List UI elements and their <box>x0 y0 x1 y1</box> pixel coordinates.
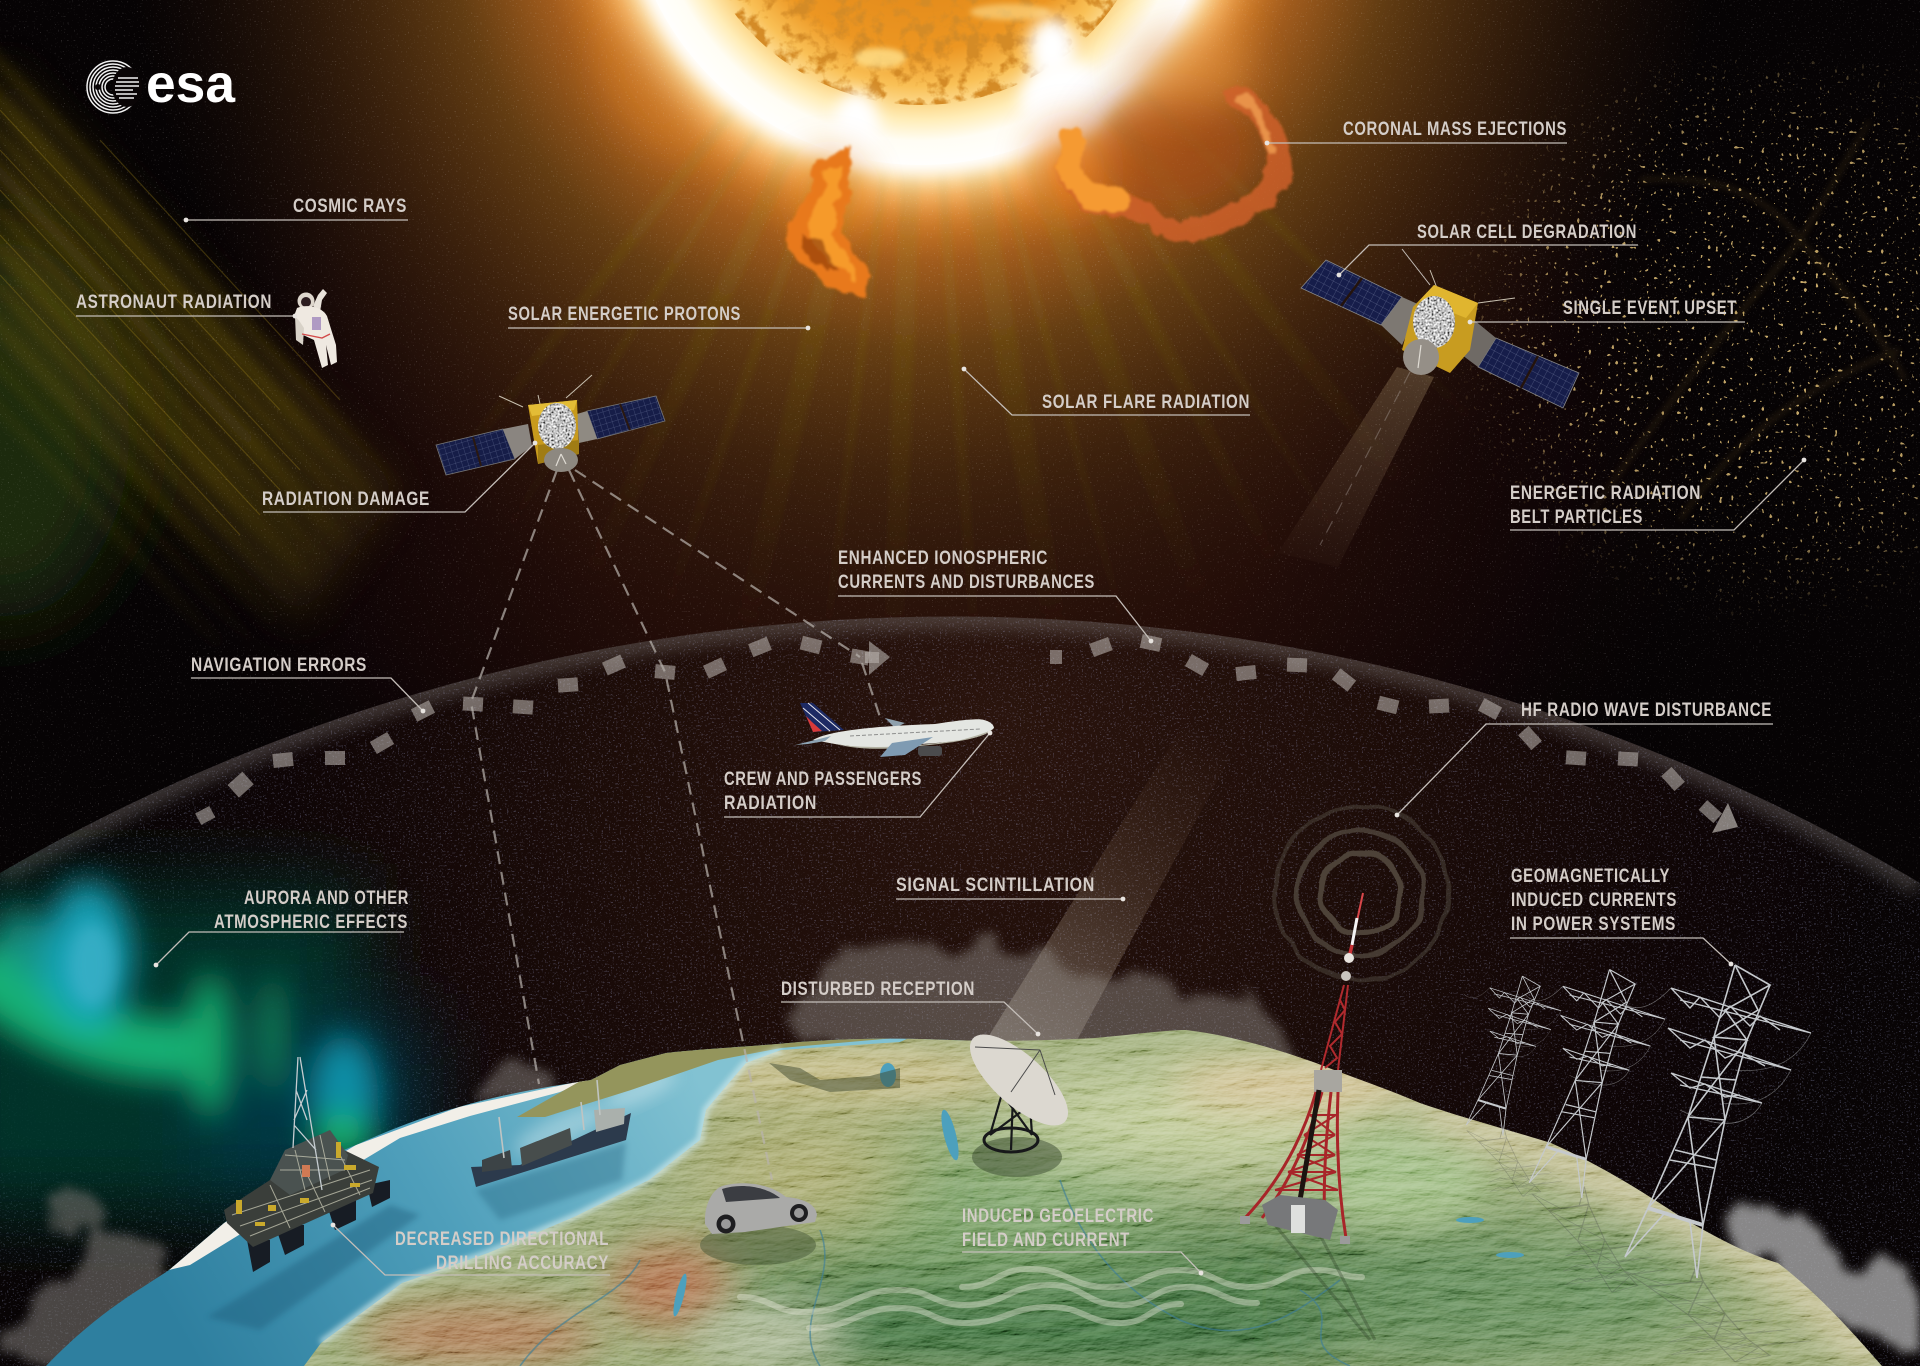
icon: navigation satellite <box>436 375 665 475</box>
label: astronaut radiation: ASTRONAUT RADIATION <box>76 292 272 313</box>
left prominence <box>785 150 872 297</box>
ionospheric dashed band right with arrow <box>1050 634 1738 833</box>
tail fin <box>800 703 844 732</box>
label: energetic radiation belt particles <box>1510 458 1806 530</box>
label: signal scintillation: SIGNAL SCINTILLATION <box>896 875 1095 896</box>
cosmic ray streaks <box>0 20 430 650</box>
label: solar flare radiation: SOLAR FLARE RADIATION <box>1042 392 1250 413</box>
icon: power transmission towers <box>1464 965 1811 1362</box>
label: single event upset: SINGLE EVENT UPSET <box>1563 298 1737 319</box>
icon: transmission tower <box>1240 893 1375 1340</box>
glow around loop <box>1085 85 1255 215</box>
land <box>304 1030 1882 1366</box>
label: HF radio wave disturbance <box>1395 700 1773 817</box>
tower shadow <box>1275 1225 1375 1340</box>
ionospheric dashed band left with arrow <box>195 636 890 825</box>
ocean <box>46 1038 972 1366</box>
peninsula <box>517 1038 895 1117</box>
atmosphere dome <box>0 616 1920 1366</box>
coast highlight <box>321 1050 781 1343</box>
label: disturbed reception <box>781 979 1040 1036</box>
label: solar flare radiation <box>962 367 1250 415</box>
derrick <box>293 1057 322 1190</box>
label: navigation errors <box>191 655 425 713</box>
label: cosmic rays <box>184 196 408 222</box>
ground current waves <box>740 1269 1362 1328</box>
hull <box>471 1113 631 1187</box>
label: single event upset <box>1468 298 1745 324</box>
label: radiation damage: RADIATION DAMAGE <box>262 489 430 510</box>
label: geomagnetically induced currents: IN POWER SYSTEMS <box>1511 914 1676 935</box>
icon: airplane <box>795 703 994 757</box>
sun <box>595 0 1247 195</box>
icon: astronaut <box>294 289 337 368</box>
upper lattice <box>1321 985 1348 1070</box>
signal scintillation beam <box>985 730 1245 1042</box>
base building <box>1262 1195 1338 1240</box>
dashed signal lines from satellite <box>471 470 882 1180</box>
label: coronal mass ejections <box>1265 119 1567 145</box>
icon: upper satellite <box>1301 260 1579 545</box>
antennas <box>499 375 592 407</box>
mast <box>1354 893 1363 935</box>
body <box>528 400 579 464</box>
label: enhanced ionospheric currents: ENHANCED IONOSPHERIC <box>838 548 1048 569</box>
label: induced geoelectric field: FIELD AND CURRENT <box>962 1230 1130 1251</box>
label: induced geoelectric field: INDUCED GEOELECTRIC <box>962 1206 1154 1227</box>
label: aurora and atmospheric effects: AURORA AND OTHER <box>244 888 409 909</box>
label: decreased directional drilling accuracy: DRILLING ACCURACY <box>436 1253 609 1274</box>
ESA globe <box>87 61 139 113</box>
label: coronal mass ejections: CORONAL MASS EJECTIONS <box>1343 119 1567 140</box>
label: crew and passengers radiation: CREW AND PASSENGERS <box>724 769 922 790</box>
label: solar cell degradation <box>1337 222 1638 285</box>
label: geomagnetically induced currents: GEOMAGNETICALLY <box>1511 866 1670 887</box>
solar prominences <box>785 30 1279 297</box>
label: decreased directional drilling accuracy <box>331 1223 610 1275</box>
icon: satellite dish <box>956 1020 1082 1177</box>
sun glow and rays <box>121 0 1721 688</box>
solar panels <box>436 429 515 475</box>
HF radio wave rings <box>1274 806 1448 980</box>
label: induced geoelectric field <box>962 1206 1203 1275</box>
label: energetic radiation belt particles: ENERGETIC RADIATION <box>1510 483 1701 504</box>
deck <box>224 1150 379 1247</box>
label: crew and passengers radiation <box>724 731 992 817</box>
label: radiation damage <box>262 441 537 512</box>
label: energetic radiation belt particles: BELT PARTICLES <box>1510 507 1643 528</box>
aurora <box>0 881 420 1210</box>
label: HF radio wave disturbance: HF RADIO WAVE DISTURBANCE <box>1521 700 1772 721</box>
ice edge <box>169 1079 591 1270</box>
label: aurora and atmospheric effects <box>154 888 409 967</box>
label: solar energetic protons: SOLAR ENERGETIC PROTONS <box>508 304 741 325</box>
icon: ship <box>471 1080 631 1220</box>
plane ground shadow <box>769 1063 900 1092</box>
right coronal loop <box>1068 96 1279 232</box>
label: enhanced ionospheric currents: CURRENTS AND DISTURBANCES <box>838 572 1095 593</box>
energetic belt particles: gold dots <box>1454 60 1920 624</box>
icon: ESA logo <box>87 54 236 114</box>
beam from satellite to ionosphere <box>1278 367 1434 567</box>
label: crew and passengers radiation: RADIATION <box>724 793 817 814</box>
Earth surface <box>46 1030 1882 1366</box>
icon: car <box>700 1183 817 1265</box>
label: geomagnetically induced currents: INDUCED CURRENTS <box>1511 890 1677 911</box>
label: solar cell degradation: SOLAR CELL DEGRADATION <box>1417 222 1637 243</box>
label: geomagnetically induced currents <box>1510 866 1733 966</box>
label: enhanced ionospheric currents <box>838 548 1153 643</box>
icon: oil rig <box>207 1057 420 1330</box>
rig columns <box>247 1180 390 1272</box>
label: decreased directional drilling accuracy: DECREASED DIRECTIONAL <box>395 1229 609 1250</box>
rivers and lakes <box>520 1180 1350 1366</box>
superstructure <box>594 1108 625 1132</box>
label: cosmic rays: COSMIC RAYS <box>293 196 407 217</box>
side flare glow <box>580 9 720 171</box>
lower legs <box>1245 1092 1346 1238</box>
clouds behind the horizon <box>0 941 1920 1366</box>
label: navigation errors: NAVIGATION ERRORS <box>191 655 367 676</box>
label: aurora and atmospheric effects: ATMOSPHERIC EFFECTS <box>214 912 408 933</box>
ESA wordmark: esa <box>146 54 236 114</box>
label: disturbed reception: DISTURBED RECEPTION <box>781 979 975 1000</box>
